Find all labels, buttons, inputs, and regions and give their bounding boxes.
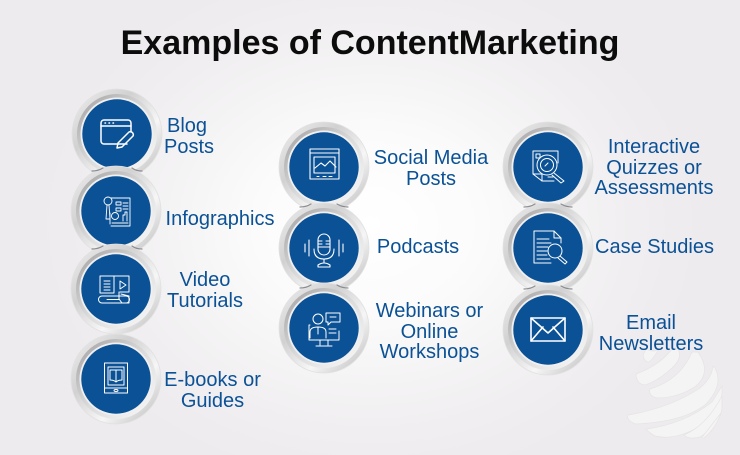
circle: Podcasts (279, 203, 369, 293)
icon: microphone (305, 234, 343, 267)
label: Infographics: Infographics (166, 208, 274, 230)
label: Webinars or Online Workshops: Webinars or (376, 300, 483, 322)
label: E-books or Guides: E-books or (164, 369, 261, 391)
label: Case Studies: Case Studies (595, 236, 714, 258)
label: Interactive Quizzes or Assessments (594, 136, 713, 199)
title: Examples of ContentMarketing (121, 24, 619, 62)
label: Video Tutorials: Tutorials (167, 290, 243, 312)
icon: document with magnifier (534, 231, 567, 264)
icon: infographic sheet (104, 197, 130, 226)
label: Webinars or Online Workshops (376, 300, 483, 363)
label: Video Tutorials: Video (180, 269, 230, 291)
icon: webinar presenter (309, 313, 340, 346)
label: Email Newsletters: Email (626, 312, 676, 334)
ring junction shadows (92, 168, 572, 289)
label: E-books or Guides: Guides (181, 390, 244, 412)
label: Blog Posts (164, 115, 214, 158)
label: Webinars or Online Workshops: Workshops (380, 341, 479, 363)
circle: Blog Posts (72, 89, 162, 179)
label: Social Media Posts (374, 147, 488, 190)
label: Interactive Quizzes or Assessments: Quizzes or (606, 156, 702, 178)
icon: book with play and pen (98, 276, 130, 303)
circle: E-books or Guides (71, 334, 161, 424)
globe watermark (628, 349, 722, 438)
label: Blog Posts: Blog (167, 115, 207, 137)
icon: browser with pencil (101, 120, 133, 148)
label: Social Media Posts: Social Media (374, 147, 488, 169)
label: Blog Posts: Posts (164, 136, 214, 158)
circle: Webinars (279, 283, 369, 373)
label: Social Media Posts: Posts (406, 168, 456, 190)
label: Interactive Quizzes or Assessments: Interactive (608, 136, 700, 158)
label: Email Newsletters: Newsletters (599, 332, 703, 354)
circle: Social Media Posts (279, 122, 369, 212)
icon: website chart (310, 149, 339, 179)
label: E-books or Guides (164, 369, 261, 412)
circle: Interactive Quizzes (503, 122, 593, 212)
label: Video Tutorials (167, 269, 243, 312)
icon: envelope (531, 318, 565, 341)
label: Email Newsletters (599, 312, 703, 354)
circle: Infographics (71, 166, 161, 256)
label: Podcasts: Podcasts (377, 236, 459, 258)
circle: Email Newsletters (503, 285, 593, 375)
icon: quiz with magnifier (533, 151, 564, 183)
icon: e-reader (104, 363, 128, 393)
circle: Case Studies (503, 203, 593, 293)
label: Interactive Quizzes or Assessments: Assessments (595, 177, 713, 199)
circle: Video Tutorials (71, 244, 161, 334)
label: Webinars or Online Workshops: Online (401, 320, 458, 342)
